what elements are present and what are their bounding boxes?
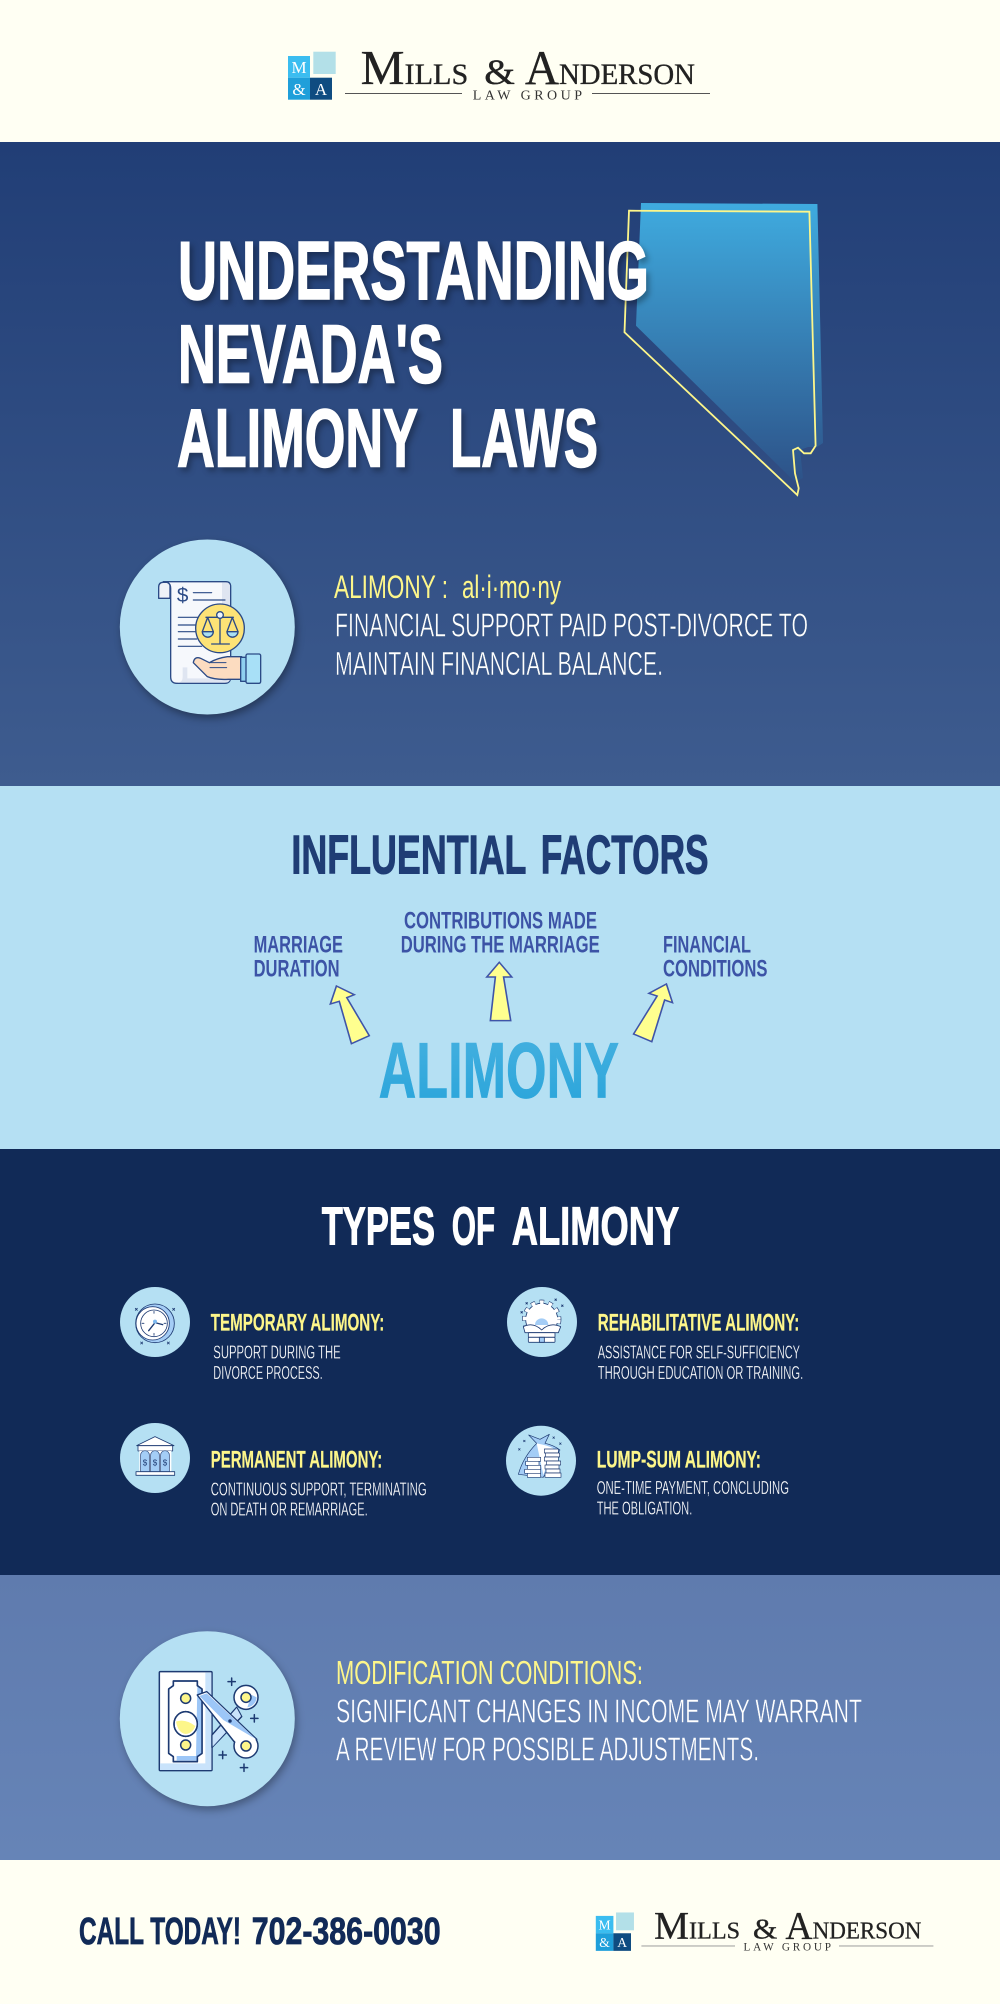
modification body: A REVIEW FOR POSSIBLE ADJUSTMENTS. [336,1732,759,1769]
logo: Mills & Anderson header: ANDERSON [525,40,695,95]
icon: document, scales and hand: $ [177,584,189,607]
description: DIVORCE PROCESS. [213,1362,323,1383]
call to action: CALL TODAY! [79,1911,241,1953]
icon: bank [120,1423,190,1493]
definition text [334,569,808,683]
heading: OF [452,1196,495,1256]
title [177,224,649,485]
icon: bank: $ [153,1459,158,1468]
panel: footer [0,1860,1000,2004]
factor: contributions: CONTRIBUTIONS MADE [404,907,597,934]
modification body [336,1694,862,1769]
factor: marriage duration: DURATION [254,956,340,983]
panel: types of alimony [0,1149,1000,1575]
logo: Mills & Anderson header: & [484,52,515,92]
factor: financial conditions: CONDITIONS [663,956,768,983]
call to action: 702-386-0030 [252,1911,441,1953]
factor: financial conditions: FINANCIAL [663,932,751,959]
logo: Mills & Anderson header [288,40,710,103]
heading [322,1196,679,1256]
logo: Mills & Anderson footer: & [599,1935,610,1950]
arrow: centre [487,962,512,1021]
map: Nevada silhouette [624,203,823,495]
description [597,1477,789,1518]
icon: bank: $ [143,1459,148,1468]
icon: document, scales and hand [120,540,295,714]
logo: Mills & Anderson header: M [291,58,307,77]
factor: financial conditions [663,932,768,983]
description [598,1342,803,1383]
logo: Mills & Anderson header: A [315,80,328,99]
title: ALIMONY [177,392,418,485]
icon: clock [120,1287,190,1357]
description [213,1342,341,1383]
item: rehabilitative [507,1287,803,1383]
definition body [335,608,808,683]
description: THROUGH EDUCATION OR TRAINING. [598,1362,803,1383]
logo: Mills & Anderson footer: ANDERSON [785,1904,921,1947]
title: PERMANENT ALIMONY: [211,1448,382,1474]
description: ASSISTANCE FOR SELF-SUFFICIENCY [598,1342,800,1363]
title: REHABILITATIVE ALIMONY: [598,1311,799,1337]
title: LAWS [450,392,598,485]
item: temporary [120,1287,384,1383]
logo: Mills & Anderson footer: M [599,1917,611,1932]
modification heading: MODIFICATION CONDITIONS: [336,1655,643,1692]
title: TEMPORARY ALIMONY: [211,1311,384,1337]
icon: gear and books [507,1287,577,1357]
factor: contributions: DURING THE MARRIAGE [401,932,600,959]
panel: modification conditions [0,1575,1000,1860]
alimony word: ALIMONY [379,1026,619,1114]
logo: Mills & Anderson footer: A [617,1935,627,1950]
factor: contributions [401,907,600,959]
modification text [336,1655,862,1769]
logo: Mills & Anderson footer [596,1904,933,1954]
logo: Mills & Anderson footer: LAW GROUP [744,1942,831,1954]
title: NEVADA'S [178,307,443,400]
logo: Mills & Anderson header: LAW GROUP [473,88,582,103]
item: lump-sum [506,1426,789,1518]
panel: influential factors [0,786,1000,1149]
logo: Mills & Anderson header: MILLS [361,40,468,95]
factor: marriage duration [254,932,343,983]
panel: header [0,0,1000,142]
item: permanent [120,1423,427,1520]
panel: hero [0,142,1000,786]
factor: marriage duration: MARRIAGE [254,932,343,959]
logo: Mills & Anderson footer: MILLS [654,1904,740,1947]
logo: Mills & Anderson header: & [292,80,306,99]
heading: FACTORS [541,823,709,885]
heading: TYPES [322,1196,435,1256]
definition term: al·i·mo·ny [462,569,562,605]
call to action [79,1911,441,1953]
description: CONTINUOUS SUPPORT, TERMINATING [211,1479,427,1500]
icon: bank: $ [163,1459,168,1468]
description: ON DEATH OR REMARRIAGE. [211,1499,368,1520]
title: LUMP-SUM ALIMONY: [597,1448,761,1474]
description: ONE-TIME PAYMENT, CONCLUDING [597,1477,789,1498]
arrow: right [634,984,672,1042]
icon: money bag and coins [506,1426,576,1496]
definition term: ALIMONY : [334,569,448,605]
heading: INFLUENTIAL [291,823,526,885]
title: UNDERSTANDING [178,224,649,317]
arrow: left [330,986,369,1044]
heading: ALIMONY [512,1196,679,1256]
arrows [330,962,672,1044]
description: SUPPORT DURING THE [213,1342,341,1363]
description: THE OBLIGATION. [597,1497,692,1518]
logo: Mills & Anderson footer: & [753,1913,777,1945]
icon: scissors cutting money [120,1631,295,1806]
description [211,1479,427,1520]
definition body: MAINTAIN FINANCIAL BALANCE. [335,646,663,683]
